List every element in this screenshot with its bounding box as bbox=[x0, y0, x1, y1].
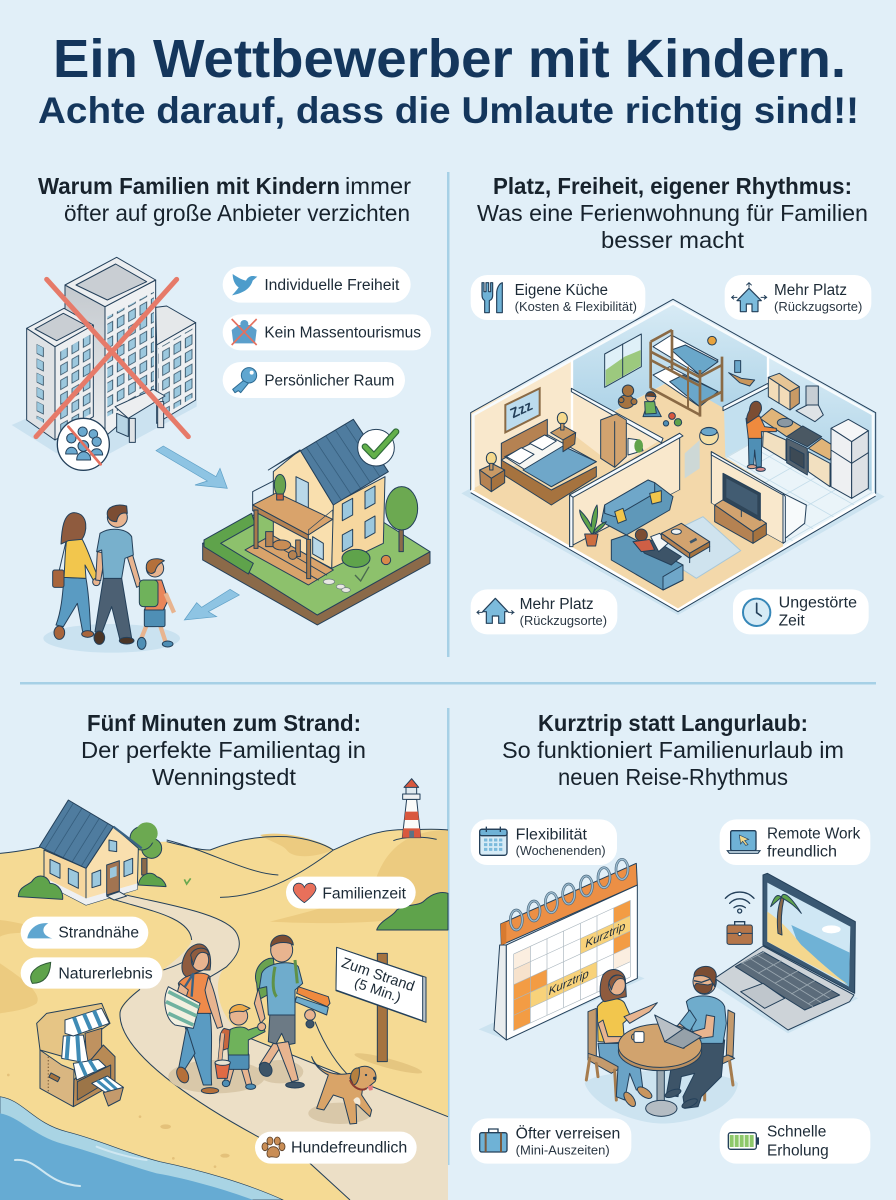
woman bbox=[53, 513, 100, 639]
icon: leaf bbox=[31, 962, 51, 983]
pill: Individuelle Freiheit bbox=[223, 267, 411, 303]
icon: calendar bbox=[480, 827, 507, 855]
pill: Remote Work: freundlich bbox=[767, 844, 837, 861]
sofa back bbox=[601, 480, 673, 535]
bedroom: Zzz bbox=[508, 397, 535, 421]
pill: Flexibilität: (Wochenenden) bbox=[516, 844, 606, 858]
heading: Fünf Minuten: Der perfekte Familientag in bbox=[81, 737, 366, 763]
pill: Öfter verreisen: Öfter verreisen bbox=[516, 1124, 620, 1142]
illustration: dog bbox=[308, 1057, 376, 1124]
woman cooking bbox=[746, 401, 793, 471]
icon: home with arrows bbox=[732, 283, 767, 312]
icon: check badge bbox=[358, 429, 396, 466]
illustration: beach house bbox=[18, 800, 166, 905]
pill: Eigene Küche bbox=[471, 275, 645, 320]
heading: Platz, Freiheit: Platz, Freiheit, eigener Rhythmus: bbox=[493, 173, 852, 199]
pill: Strandnähe bbox=[21, 917, 148, 949]
teddy bbox=[618, 385, 637, 408]
icon: battery bbox=[728, 1133, 759, 1149]
rug bbox=[645, 517, 741, 578]
heading: Platz, Freiheit: besser macht bbox=[601, 227, 745, 253]
icon: suitcase bbox=[480, 1129, 507, 1152]
heading: Warum Familien: öfter auf große Anbieter verzichten bbox=[64, 200, 410, 226]
plant bbox=[580, 505, 606, 546]
pill: Naturerlebnis bbox=[21, 957, 162, 989]
heading: Kurztrip: neuen Reise-Rhythmus bbox=[558, 764, 788, 790]
man bbox=[94, 505, 141, 644]
pill: Eigene Küche: (Kosten & Flexibilität) bbox=[515, 300, 637, 314]
panel: beach scene bbox=[0, 779, 448, 1200]
pill: Mehr Platz bottom bbox=[471, 589, 617, 634]
calendar grid: Kurztrip bbox=[585, 919, 626, 951]
child bbox=[215, 1005, 266, 1089]
panel: apartment bbox=[461, 275, 885, 634]
kids room window bbox=[605, 334, 641, 387]
kitchen bbox=[746, 373, 868, 498]
sign: Zum Strand: Zum Strand bbox=[339, 955, 416, 995]
TV and stand bbox=[715, 473, 766, 543]
icon: crowd crossed out small bbox=[232, 319, 257, 345]
icon: wave bbox=[27, 923, 52, 938]
pill: Ungestörte Zeit: Ungestörte bbox=[779, 595, 857, 612]
heading: Warum Familien bbox=[38, 173, 411, 226]
chairs bbox=[586, 1008, 735, 1100]
pill: Mehr Platz top: Mehr Platz bbox=[774, 282, 847, 299]
icon: wifi bbox=[725, 892, 754, 913]
sofa front with person bbox=[611, 529, 683, 590]
sea bbox=[0, 1097, 283, 1200]
pill: Öfter verreisen bbox=[471, 1118, 631, 1164]
pill: Remote Work: Remote Work bbox=[767, 825, 861, 842]
bunk bed bbox=[651, 330, 722, 417]
pill: Mehr Platz bottom: (Rückzugsorte) bbox=[520, 614, 607, 628]
heading: Fünf Minuten: Wenningstedt bbox=[152, 764, 297, 790]
heading: Fünf Minuten bbox=[81, 710, 366, 790]
pill: Kein Massentourismus bbox=[223, 314, 431, 350]
pill: Persönlicher Raum: Persönlicher Raum bbox=[264, 372, 394, 389]
illustration: bushes right bbox=[377, 893, 448, 930]
pill: Ungestörte Zeit: Zeit bbox=[779, 613, 805, 630]
arrow: hotel to house bbox=[156, 446, 227, 488]
path bbox=[110, 895, 448, 1200]
heading: Platz, Freiheit: Was eine Ferienwohnung für Familien bbox=[477, 200, 868, 226]
pill: Strandnähe: Strandnähe bbox=[58, 925, 139, 942]
child playing bbox=[643, 392, 682, 426]
panel: short trip bbox=[471, 819, 870, 1164]
illustration: laptop with beach bbox=[708, 873, 858, 1033]
pill: Mehr Platz top bbox=[725, 275, 871, 320]
icon: briefcase bbox=[727, 922, 752, 944]
heading: Platz, Freiheit bbox=[477, 173, 868, 253]
pill: Schnelle Erholung: Schnelle bbox=[767, 1124, 826, 1141]
arrow: house to family bbox=[184, 589, 239, 620]
father bbox=[254, 935, 352, 1088]
heading: Kurztrip: Kurztrip statt Langurlaub: bbox=[538, 710, 808, 736]
pill: Schnelle Erholung bbox=[720, 1118, 870, 1164]
pill: Öfter verreisen: (Mini-Auszeiten) bbox=[516, 1143, 610, 1157]
heading: Kurztrip: So funktioniert Familienurlaub im bbox=[502, 737, 844, 763]
illustration: house on lawn bbox=[203, 419, 430, 625]
heading: Kurztrip bbox=[502, 710, 844, 790]
pill: Kein Massentourismus: Kein Massentourismus bbox=[264, 325, 421, 342]
heading: Warum Familien: immer bbox=[345, 173, 411, 199]
pill: Eigene Küche: Eigene Küche bbox=[515, 282, 608, 299]
child bbox=[137, 559, 174, 649]
pill: Individuelle Freiheit: Individuelle Freiheit bbox=[264, 277, 400, 294]
illustration: family walking bbox=[43, 505, 180, 653]
pill: Ungestörte Zeit bbox=[733, 589, 869, 634]
illustration: couple at table bbox=[585, 966, 738, 1123]
icon: dove bbox=[232, 274, 257, 295]
pill: Remote Work bbox=[720, 819, 870, 865]
calendar grid bbox=[514, 900, 630, 1031]
icon: paw bbox=[262, 1137, 285, 1157]
icon: crowd crossed out bbox=[57, 418, 109, 470]
illustration: apartment floor plan bbox=[461, 299, 885, 615]
title bbox=[38, 29, 859, 131]
pill: Persönlicher Raum bbox=[223, 362, 405, 398]
pill: Familienzeit bbox=[286, 877, 416, 909]
sign: Zum Strand bbox=[336, 947, 426, 1077]
pill: Flexibilität bbox=[471, 819, 617, 865]
coffee table bbox=[661, 523, 710, 563]
pill: Hundefreundlich: Hundefreundlich bbox=[291, 1140, 407, 1157]
table bbox=[618, 1015, 702, 1116]
icon: cutlery bbox=[482, 283, 502, 313]
pill: Schnelle Erholung: Erholung bbox=[767, 1143, 829, 1160]
heading: Fünf Minuten: Fünf Minuten zum Strand: bbox=[87, 710, 361, 736]
bath bbox=[783, 493, 806, 540]
woman seated bbox=[597, 970, 657, 1108]
icon: clock bbox=[743, 599, 770, 626]
pill: Familienzeit: Familienzeit bbox=[322, 885, 407, 902]
living room walls bbox=[570, 433, 680, 547]
pill: Mehr Platz top: (Rückzugsorte) bbox=[774, 300, 862, 314]
heading: Warum Familien: Warum Familien mit Kindern bbox=[38, 173, 340, 199]
bedroom bbox=[480, 388, 643, 505]
pill: Naturerlebnis: Naturerlebnis bbox=[58, 965, 153, 982]
illustration: hotel complex bbox=[12, 257, 197, 453]
icon: red cross over hotel bbox=[36, 279, 188, 437]
calendar grid: Kurztrip bbox=[549, 966, 589, 998]
pill: Flexibilität: Flexibilität bbox=[516, 826, 588, 843]
panel: hotel vs house bbox=[12, 257, 431, 653]
pill: Mehr Platz bottom: Mehr Platz bbox=[520, 596, 594, 613]
illustration: family at the beach bbox=[165, 935, 352, 1094]
icon: heart bbox=[293, 883, 316, 903]
icon: home with arrows small bbox=[477, 598, 514, 623]
mother bbox=[165, 944, 223, 1094]
man seated bbox=[664, 966, 726, 1110]
sign: Zum Strand: (5 Min.) bbox=[352, 974, 403, 1005]
title: Ein Wettbewerber mit Kindern. bbox=[53, 29, 846, 89]
pill: Hundefreundlich bbox=[255, 1132, 417, 1164]
illustration: beach chair bbox=[37, 1003, 123, 1107]
illustration: dunes and beach bbox=[0, 829, 448, 1200]
title: Achte darauf, dass die Umlaute richtig sind!! bbox=[38, 90, 859, 131]
walls bbox=[471, 299, 876, 608]
illustration: lighthouse bbox=[402, 779, 421, 838]
icon: key bbox=[233, 368, 257, 393]
icon: laptop small bbox=[727, 831, 760, 853]
illustration: wall calendar bbox=[479, 859, 645, 1040]
